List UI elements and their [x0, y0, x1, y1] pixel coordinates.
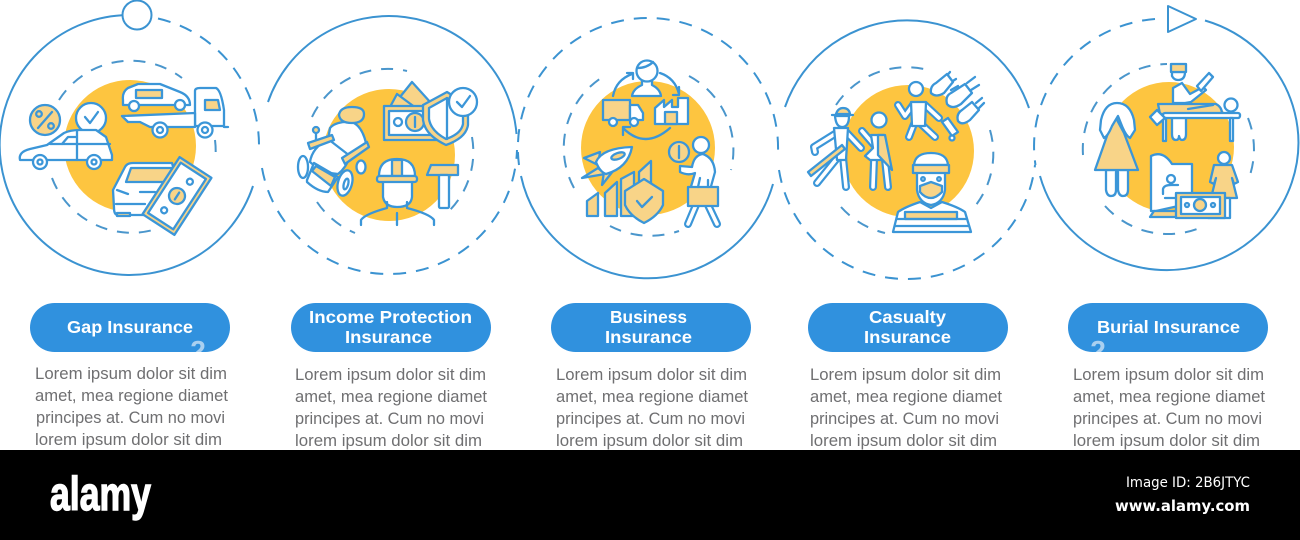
column: Casualty Insurance: Casualty — [869, 307, 946, 327]
footer url: www.alamy.com — [1115, 497, 1250, 515]
icon: mourning woman, doctor, gravestone, cash — [1095, 64, 1240, 218]
text: Gap Insurance body: lorem ipsum dolor sit dim — [35, 430, 222, 449]
column: Business Insurance: Business — [610, 307, 687, 327]
column: Gap Insurance — [30, 303, 233, 449]
footer logo: alamy — [50, 467, 151, 520]
column: Business Insurance — [551, 303, 753, 450]
text: Business body: lorem ipsum dolor sit dim — [556, 431, 743, 450]
panel: Casualty Insurance circle — [779, 20, 1035, 279]
text: Burial body: amet, mea regione diamet — [1073, 387, 1265, 406]
text: Income Protection body: amet, mea regione diamet — [295, 387, 487, 406]
column: Casualty Insurance: Insurance — [864, 327, 951, 347]
icon: start marker circle — [122, 0, 152, 30]
column: Burial Insurance — [1068, 303, 1270, 450]
column: Burial Insurance: 2 — [1090, 335, 1106, 366]
footer bar — [0, 450, 1300, 540]
text: Burial body: Lorem ipsum dolor sit dim — [1073, 365, 1264, 384]
icon: cars and tow truck — [20, 84, 228, 235]
icon: robbery, runner, bombs, thief — [808, 72, 984, 232]
text: Casualty body: Lorem ipsum dolor sit dim — [810, 365, 1001, 384]
text: Gap Insurance body: amet, mea regione diamet — [35, 386, 228, 405]
text: Business body: amet, mea regione diamet — [556, 387, 748, 406]
icon: business cycle, rocket, growth bars, shield, person — [582, 60, 718, 224]
panel: Gap Insurance circle — [0, 0, 259, 275]
text: Income Protection body: principes at. Cum no movi — [295, 409, 484, 428]
text: Casualty body: amet, mea regione diamet — [810, 387, 1002, 406]
text: Casualty body: lorem ipsum dolor sit dim — [810, 431, 997, 450]
panel: Business Insurance circle — [518, 18, 778, 278]
text: Business body: principes at. Cum no movi — [556, 409, 745, 428]
text: Casualty body: principes at. Cum no movi — [810, 409, 999, 428]
text: Gap Insurance body: principes at. Cum no movi — [36, 408, 225, 427]
column: Casualty Insurance — [808, 303, 1008, 450]
column: Gap Insurance: Gap Insurance — [67, 317, 193, 337]
column: Income Protection Insurance: Income Protection — [309, 307, 472, 327]
footer image id: Image ID: 2B6JTYC — [1126, 475, 1250, 491]
panel: Burial Insurance circle — [1034, 6, 1298, 270]
column: Income Protection Insurance — [291, 303, 492, 450]
column: Gap Insurance: 2 — [190, 335, 206, 366]
text: Income Protection body: lorem ipsum dolor sit dim — [295, 431, 482, 450]
column: Burial Insurance: Burial Insurance — [1097, 317, 1240, 337]
text: Burial body: lorem ipsum dolor sit dim — [1073, 431, 1260, 450]
text: Burial body: principes at. Cum no movi — [1073, 409, 1262, 428]
icon: end marker triangle — [1168, 6, 1196, 32]
column: Business Insurance: Insurance — [605, 327, 692, 347]
icon: wheelchair, cash, shield, worker, hammer — [298, 82, 477, 225]
text: Gap Insurance body: Lorem ipsum dolor sit dim — [35, 364, 227, 383]
text: Business body: Lorem ipsum dolor sit dim — [556, 365, 747, 384]
panel: Income Protection circle — [262, 16, 517, 274]
text: Income Protection body: Lorem ipsum dolor sit dim — [295, 365, 486, 384]
column: Income Protection Insurance: Insurance — [345, 327, 432, 347]
